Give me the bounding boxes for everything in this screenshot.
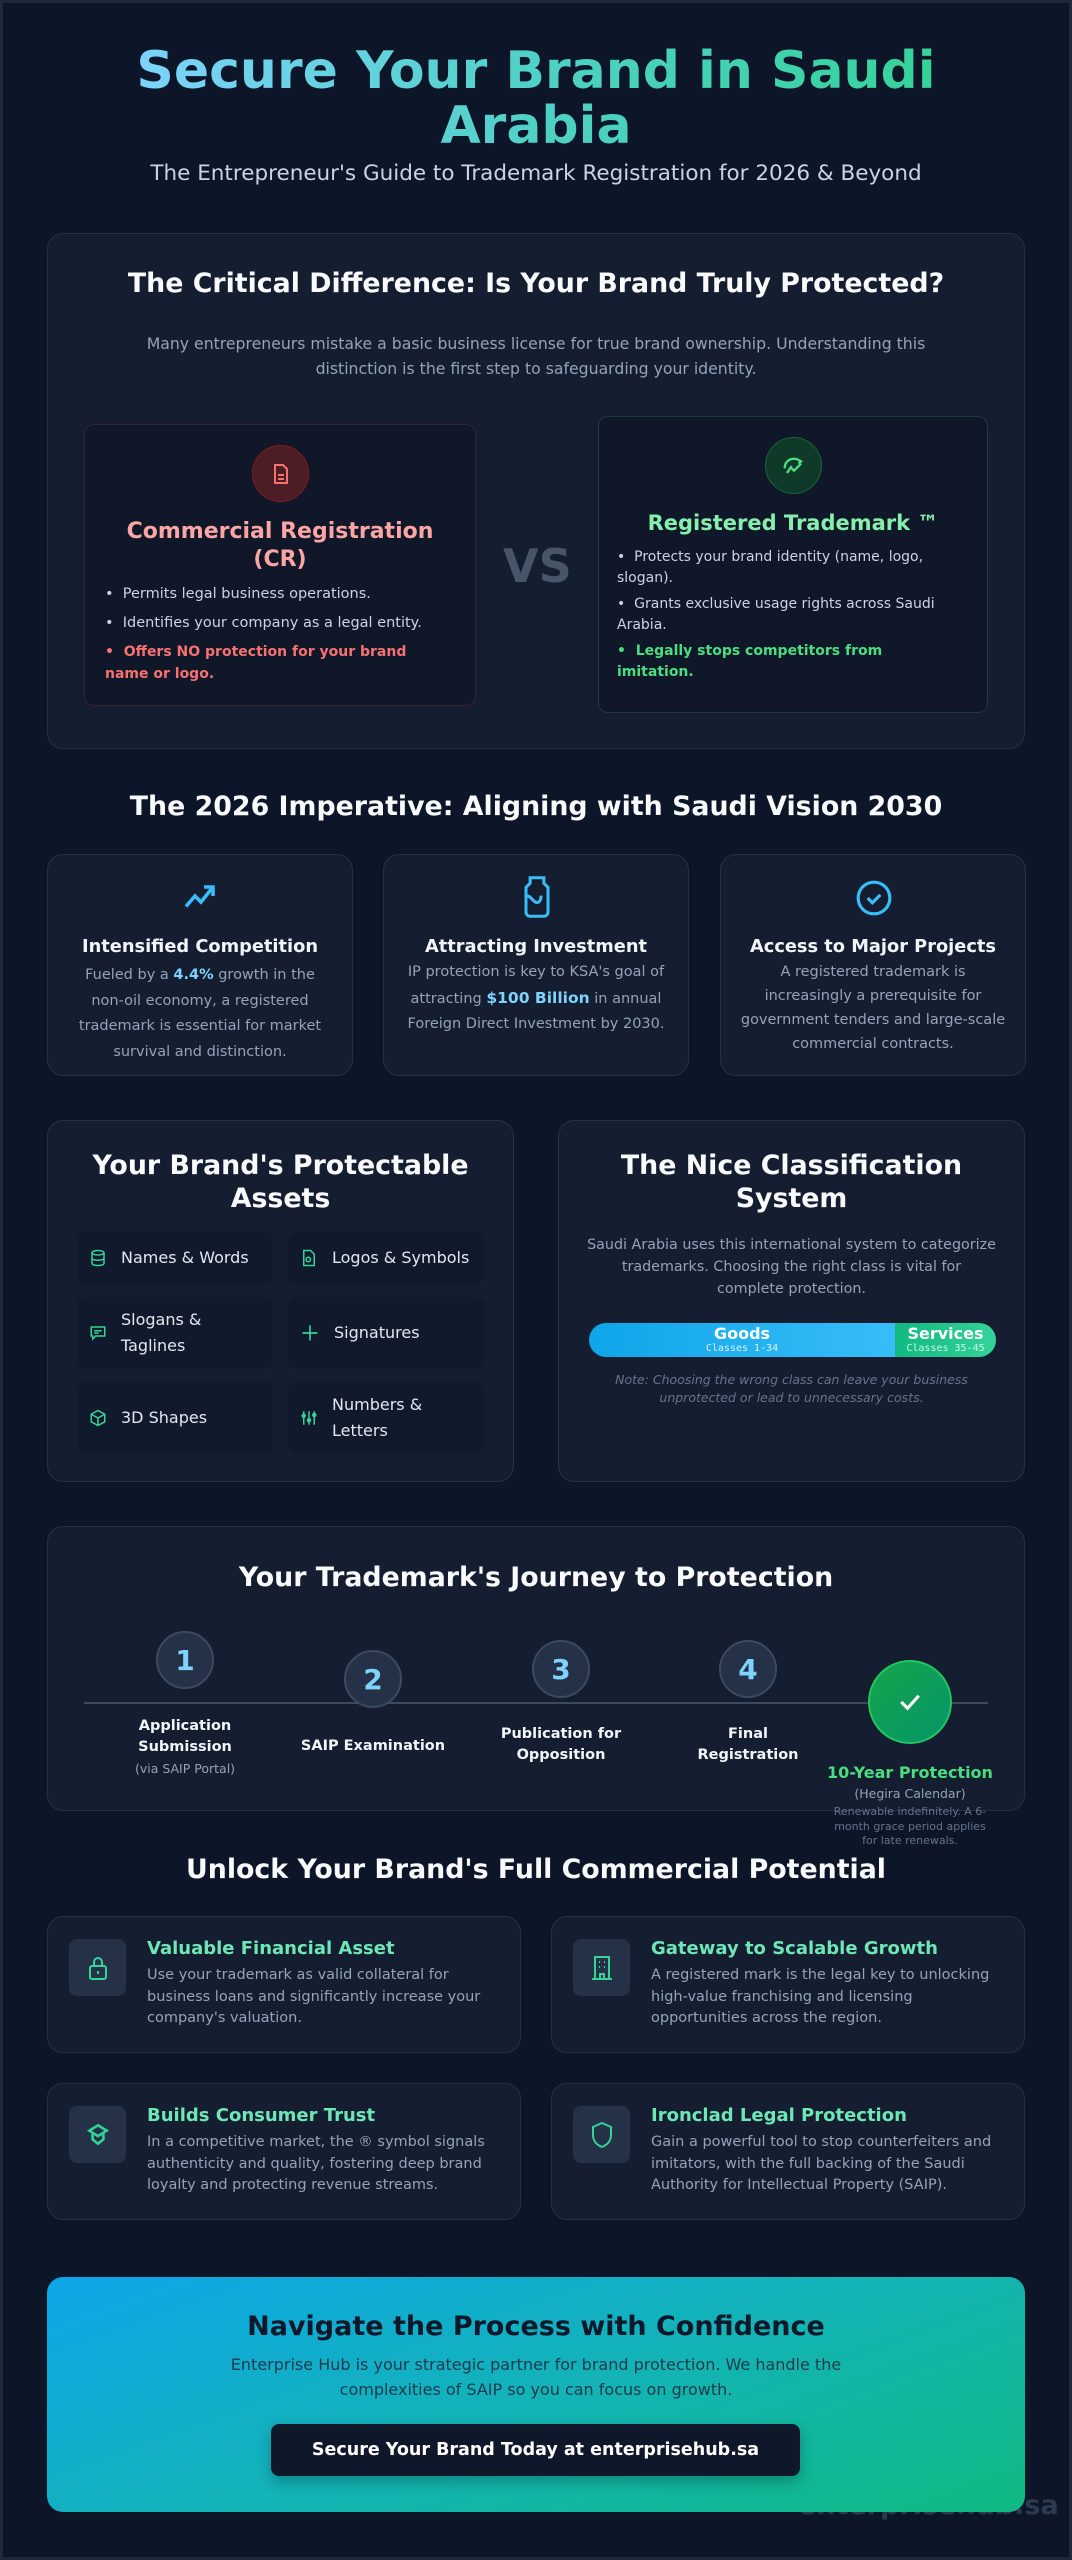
benefit: consumer trust: Builds Consumer Trust bbox=[147, 2105, 375, 2126]
CTA text: complexities of SAIP so you can focus on growth. bbox=[340, 2380, 732, 2399]
tile: numbers bbox=[288, 1382, 484, 1453]
card: attracting investment: IP protection is key to KSA's goal of attracting $100 Billion in annual Foreign Direct Investment by 2030. bbox=[408, 964, 664, 1032]
CR title: Commercial Registration bbox=[127, 519, 433, 544]
intro text: Many entrepreneurs mistake a basic business license for true brand ownership. Understanding this bbox=[147, 334, 925, 353]
TM title: Registered Trademark ™ bbox=[648, 511, 938, 535]
bar chart: goods vs services: Goods bbox=[714, 1324, 770, 1343]
tile: slogans: Taglines bbox=[121, 1336, 185, 1355]
heading: unlock: Unlock Your Brand's Full Commercial Potential bbox=[186, 1854, 886, 1885]
CR bullets: • Offers NO protection for your brand name or logo. bbox=[105, 644, 406, 682]
tile: 3d bbox=[77, 1382, 273, 1453]
subtitle: The Entrepreneur's Guide to Trademark Registration for 2026 & Beyond bbox=[150, 161, 922, 186]
panel: protectable assets bbox=[47, 1120, 514, 1482]
step 2: 2 bbox=[363, 1662, 383, 1696]
step 2 bbox=[344, 1650, 402, 1708]
heading: assets: Assets bbox=[231, 1183, 330, 1214]
icon: building bbox=[573, 1939, 630, 1996]
label 1: (via SAIP Portal) bbox=[135, 1761, 235, 1776]
card: commercial registration bbox=[84, 424, 476, 706]
label 1 bbox=[135, 1718, 235, 1776]
CTA text bbox=[231, 2355, 841, 2399]
card: major projects bbox=[720, 854, 1026, 1076]
tile: names: Names & Words bbox=[121, 1248, 249, 1267]
icon: document bbox=[252, 445, 309, 502]
step 3 bbox=[532, 1640, 590, 1698]
heading: nice bbox=[621, 1150, 962, 1214]
benefit: legal protection: Ironclad Legal Protection bbox=[651, 2105, 907, 2126]
heading: assets bbox=[92, 1150, 468, 1214]
TM bullets: • Legally stops competitors from imitation. bbox=[617, 643, 882, 680]
CTA button: Secure Your Brand Today at enterprisehub.sa bbox=[312, 2440, 759, 2460]
card: major projects: A registered trademark is increasingly a prerequisite for government tenders and large-scale commercial contracts. bbox=[741, 964, 1005, 1052]
icon: jar bbox=[524, 876, 550, 918]
CTA text: Enterprise Hub is your strategic partner for brand protection. We handle the bbox=[231, 2355, 841, 2374]
benefit: financial asset: Valuable Financial Asset bbox=[147, 1938, 395, 1959]
tile: numbers: Letters bbox=[332, 1420, 388, 1440]
note: Note: Choosing the wrong class can leave your business unprotected or lead to unnecessary costs. bbox=[615, 1372, 968, 1405]
CTA heading: Navigate the Process with Confidence bbox=[247, 2311, 825, 2342]
card: intensified competition: Intensified Competition bbox=[82, 936, 318, 957]
benefit: legal protection: Gain a powerful tool to stop counterfeiters and imitators, with the full backing of the Saudi Authority for Intellectual Property (SAIP). bbox=[651, 2134, 991, 2193]
heading: journey: Your Trademark's Journey to Protection bbox=[239, 1562, 833, 1593]
heading: nice: The Nice Classification bbox=[621, 1150, 962, 1181]
icon: lock bbox=[69, 1939, 126, 1996]
heading: 2026 imperative: The 2026 Imperative: Aligning with Saudi Vision 2030 bbox=[130, 791, 942, 822]
card: attracting investment bbox=[383, 854, 689, 1076]
label 4 bbox=[697, 1726, 799, 1763]
CR title bbox=[127, 519, 433, 572]
benefit: financial asset bbox=[47, 1916, 521, 2053]
icon: check circle bbox=[856, 880, 892, 916]
label 2: SAIP Examination bbox=[301, 1738, 445, 1754]
label 3: Publication for bbox=[501, 1726, 621, 1742]
step 1: 1 bbox=[175, 1644, 195, 1676]
step 4 bbox=[719, 1640, 777, 1698]
icon: trend up bbox=[184, 885, 215, 908]
label final: (Hegira Calendar) bbox=[854, 1786, 966, 1801]
TM bullets: • Grants exclusive usage rights across Saudi Arabia. bbox=[617, 596, 935, 633]
tile: 3d: 3D Shapes bbox=[121, 1408, 207, 1426]
tile: names bbox=[77, 1232, 273, 1284]
panel: nice classification bbox=[558, 1120, 1025, 1482]
bar chart: goods vs services: Classes 1-34 bbox=[706, 1343, 778, 1354]
tile: logos: Logos & Symbols bbox=[332, 1248, 469, 1267]
label 4: Registration bbox=[697, 1747, 799, 1763]
bar chart: goods vs services: Classes 35-45 bbox=[906, 1343, 985, 1354]
CTA button bbox=[271, 2424, 800, 2476]
heading: assets: Your Brand's Protectable bbox=[92, 1150, 468, 1181]
label 1: Application bbox=[139, 1718, 231, 1734]
CR bullets bbox=[105, 586, 422, 682]
benefit: financial asset: Use your trademark as valid collateral for business loans and significantly increase your company's valuation. bbox=[147, 1967, 480, 2026]
icon: final check bbox=[868, 1660, 952, 1744]
step 1 bbox=[156, 1631, 214, 1689]
step 3: 3 bbox=[551, 1652, 571, 1686]
step 4: 4 bbox=[738, 1652, 758, 1686]
intro text: distinction is the first step to safeguarding your identity. bbox=[316, 359, 756, 378]
tile: signatures: Signatures bbox=[334, 1323, 420, 1342]
label final bbox=[827, 1763, 993, 1847]
benefit: consumer trust: In a competitive market, the ® symbol signals authenticity and quality, fostering deep brand loyalty and protecting revenue streams. bbox=[147, 2134, 485, 2193]
bar chart: goods vs services: Services bbox=[907, 1324, 984, 1343]
panel: journey bbox=[47, 1526, 1025, 1811]
icon: badge bbox=[69, 2106, 126, 2163]
panel: critical difference bbox=[47, 233, 1025, 749]
intro text bbox=[147, 334, 925, 378]
tile: logos bbox=[288, 1232, 484, 1284]
card: attracting investment: Attracting Investment bbox=[425, 936, 647, 957]
watermark: enterprisehub.sa bbox=[798, 2490, 1059, 2521]
label 1: Submission bbox=[138, 1739, 232, 1755]
benefit: scalable growth: Gateway to Scalable Growth bbox=[651, 1938, 938, 1959]
label final: Renewable indefinitely. A 6-month grace period applies for late renewals. bbox=[834, 1805, 986, 1847]
VS: VS bbox=[503, 539, 572, 593]
tile: signatures bbox=[288, 1297, 484, 1369]
CTA panel bbox=[47, 2277, 1025, 2512]
title: Secure Your Brand in Saudi bbox=[136, 41, 936, 101]
TM bullets: • Protects your brand identity (name, logo, slogan). bbox=[617, 549, 923, 586]
TM bullets bbox=[617, 549, 935, 680]
label 4: Final bbox=[728, 1726, 768, 1742]
CR title: (CR) bbox=[253, 547, 307, 572]
tile: numbers: Numbers & bbox=[332, 1394, 422, 1414]
benefit: consumer trust bbox=[47, 2083, 521, 2220]
benefit: legal protection bbox=[551, 2083, 1025, 2220]
icon: shield check bbox=[765, 437, 822, 494]
heading: nice: System bbox=[736, 1183, 847, 1214]
benefit: scalable growth bbox=[551, 1916, 1025, 2053]
label 3 bbox=[501, 1726, 622, 1763]
title: Arabia bbox=[440, 96, 632, 156]
card: intensified competition: Fueled by a 4.4% growth in the non-oil economy, a registered trademark is essential for market survival and distinction. bbox=[79, 967, 321, 1060]
card: registered trademark bbox=[598, 416, 988, 713]
benefit: scalable growth: A registered mark is the legal key to unlocking high-value franchising and licensing opportunities across the region. bbox=[651, 1967, 989, 2026]
bar chart: goods vs services bbox=[589, 1323, 996, 1357]
icon: shield bbox=[573, 2106, 630, 2163]
timeline line bbox=[84, 1702, 988, 1704]
CR bullets: • Identifies your company as a legal entity. bbox=[105, 615, 422, 631]
title bbox=[0, 44, 1072, 154]
label final: 10-Year Protection bbox=[827, 1763, 993, 1782]
card: intensified competition bbox=[47, 854, 353, 1076]
nice text: Saudi Arabia uses this international system to categorize trademarks. Choosing the right class is vital for complete protection. bbox=[587, 1237, 996, 1297]
tile: slogans bbox=[77, 1297, 273, 1369]
heading: critical difference: The Critical Difference: Is Your Brand Truly Protected? bbox=[128, 268, 944, 299]
CR bullets: • Permits legal business operations. bbox=[105, 586, 371, 602]
card: major projects: Access to Major Projects bbox=[750, 936, 996, 957]
tile: slogans: Slogans & bbox=[121, 1310, 201, 1329]
label 3: Opposition bbox=[517, 1747, 605, 1763]
